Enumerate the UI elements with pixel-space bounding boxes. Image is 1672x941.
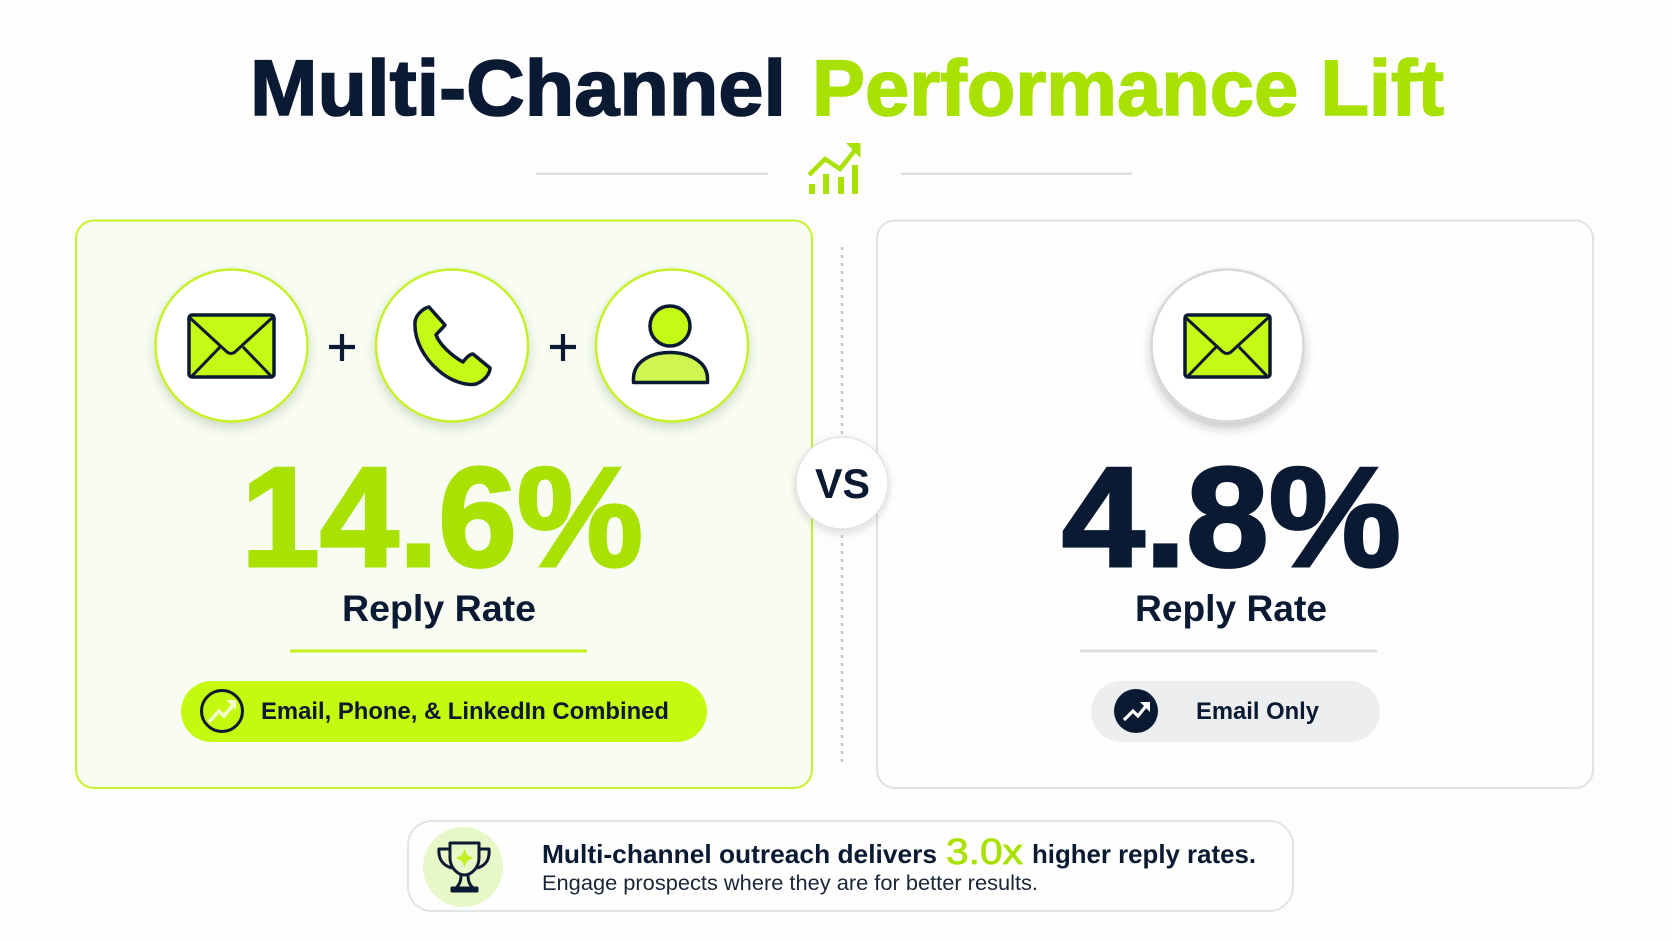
title: Performance Lift	[812, 43, 1444, 132]
label: reply rate: Reply Rate	[1135, 588, 1327, 629]
subtext: Engage prospects where they are for better results.	[542, 871, 1038, 895]
label: reply rate: Reply Rate	[342, 588, 536, 629]
title: Multi-Channel	[250, 43, 786, 132]
vs badge	[796, 437, 888, 529]
plus	[329, 334, 355, 361]
headline	[542, 831, 1256, 872]
pill: combined	[181, 681, 707, 742]
pill: email only	[1091, 681, 1380, 742]
center divider	[841, 247, 843, 762]
callout	[408, 821, 1293, 911]
panel: email only	[877, 220, 1593, 788]
icon: person circle	[596, 270, 748, 422]
icon: phone circle	[376, 270, 528, 422]
icon: email circle	[1152, 270, 1304, 422]
icon: trend	[1114, 689, 1158, 733]
stat: 4.8%: 4.8%	[1062, 438, 1401, 597]
stat: 14.6%: 14.6%	[241, 438, 643, 597]
icon: trophy	[423, 827, 503, 907]
pill: email only: Email Only	[1196, 698, 1320, 725]
plus	[550, 334, 576, 361]
panel: multi-channel	[76, 220, 812, 788]
pill: combined: Email, Phone, & LinkedIn Combined	[261, 698, 669, 725]
title divider with chart icon	[536, 143, 1132, 194]
vs badge: VS	[815, 460, 870, 507]
title	[250, 43, 1444, 132]
icon: trend	[202, 690, 242, 732]
headline: Multi-channel outreach delivers	[542, 839, 937, 869]
headline: 3.0x	[946, 831, 1023, 872]
headline: higher reply rates.	[1032, 839, 1256, 869]
icon: growth chart	[809, 143, 860, 194]
icon: email circle	[156, 270, 308, 422]
